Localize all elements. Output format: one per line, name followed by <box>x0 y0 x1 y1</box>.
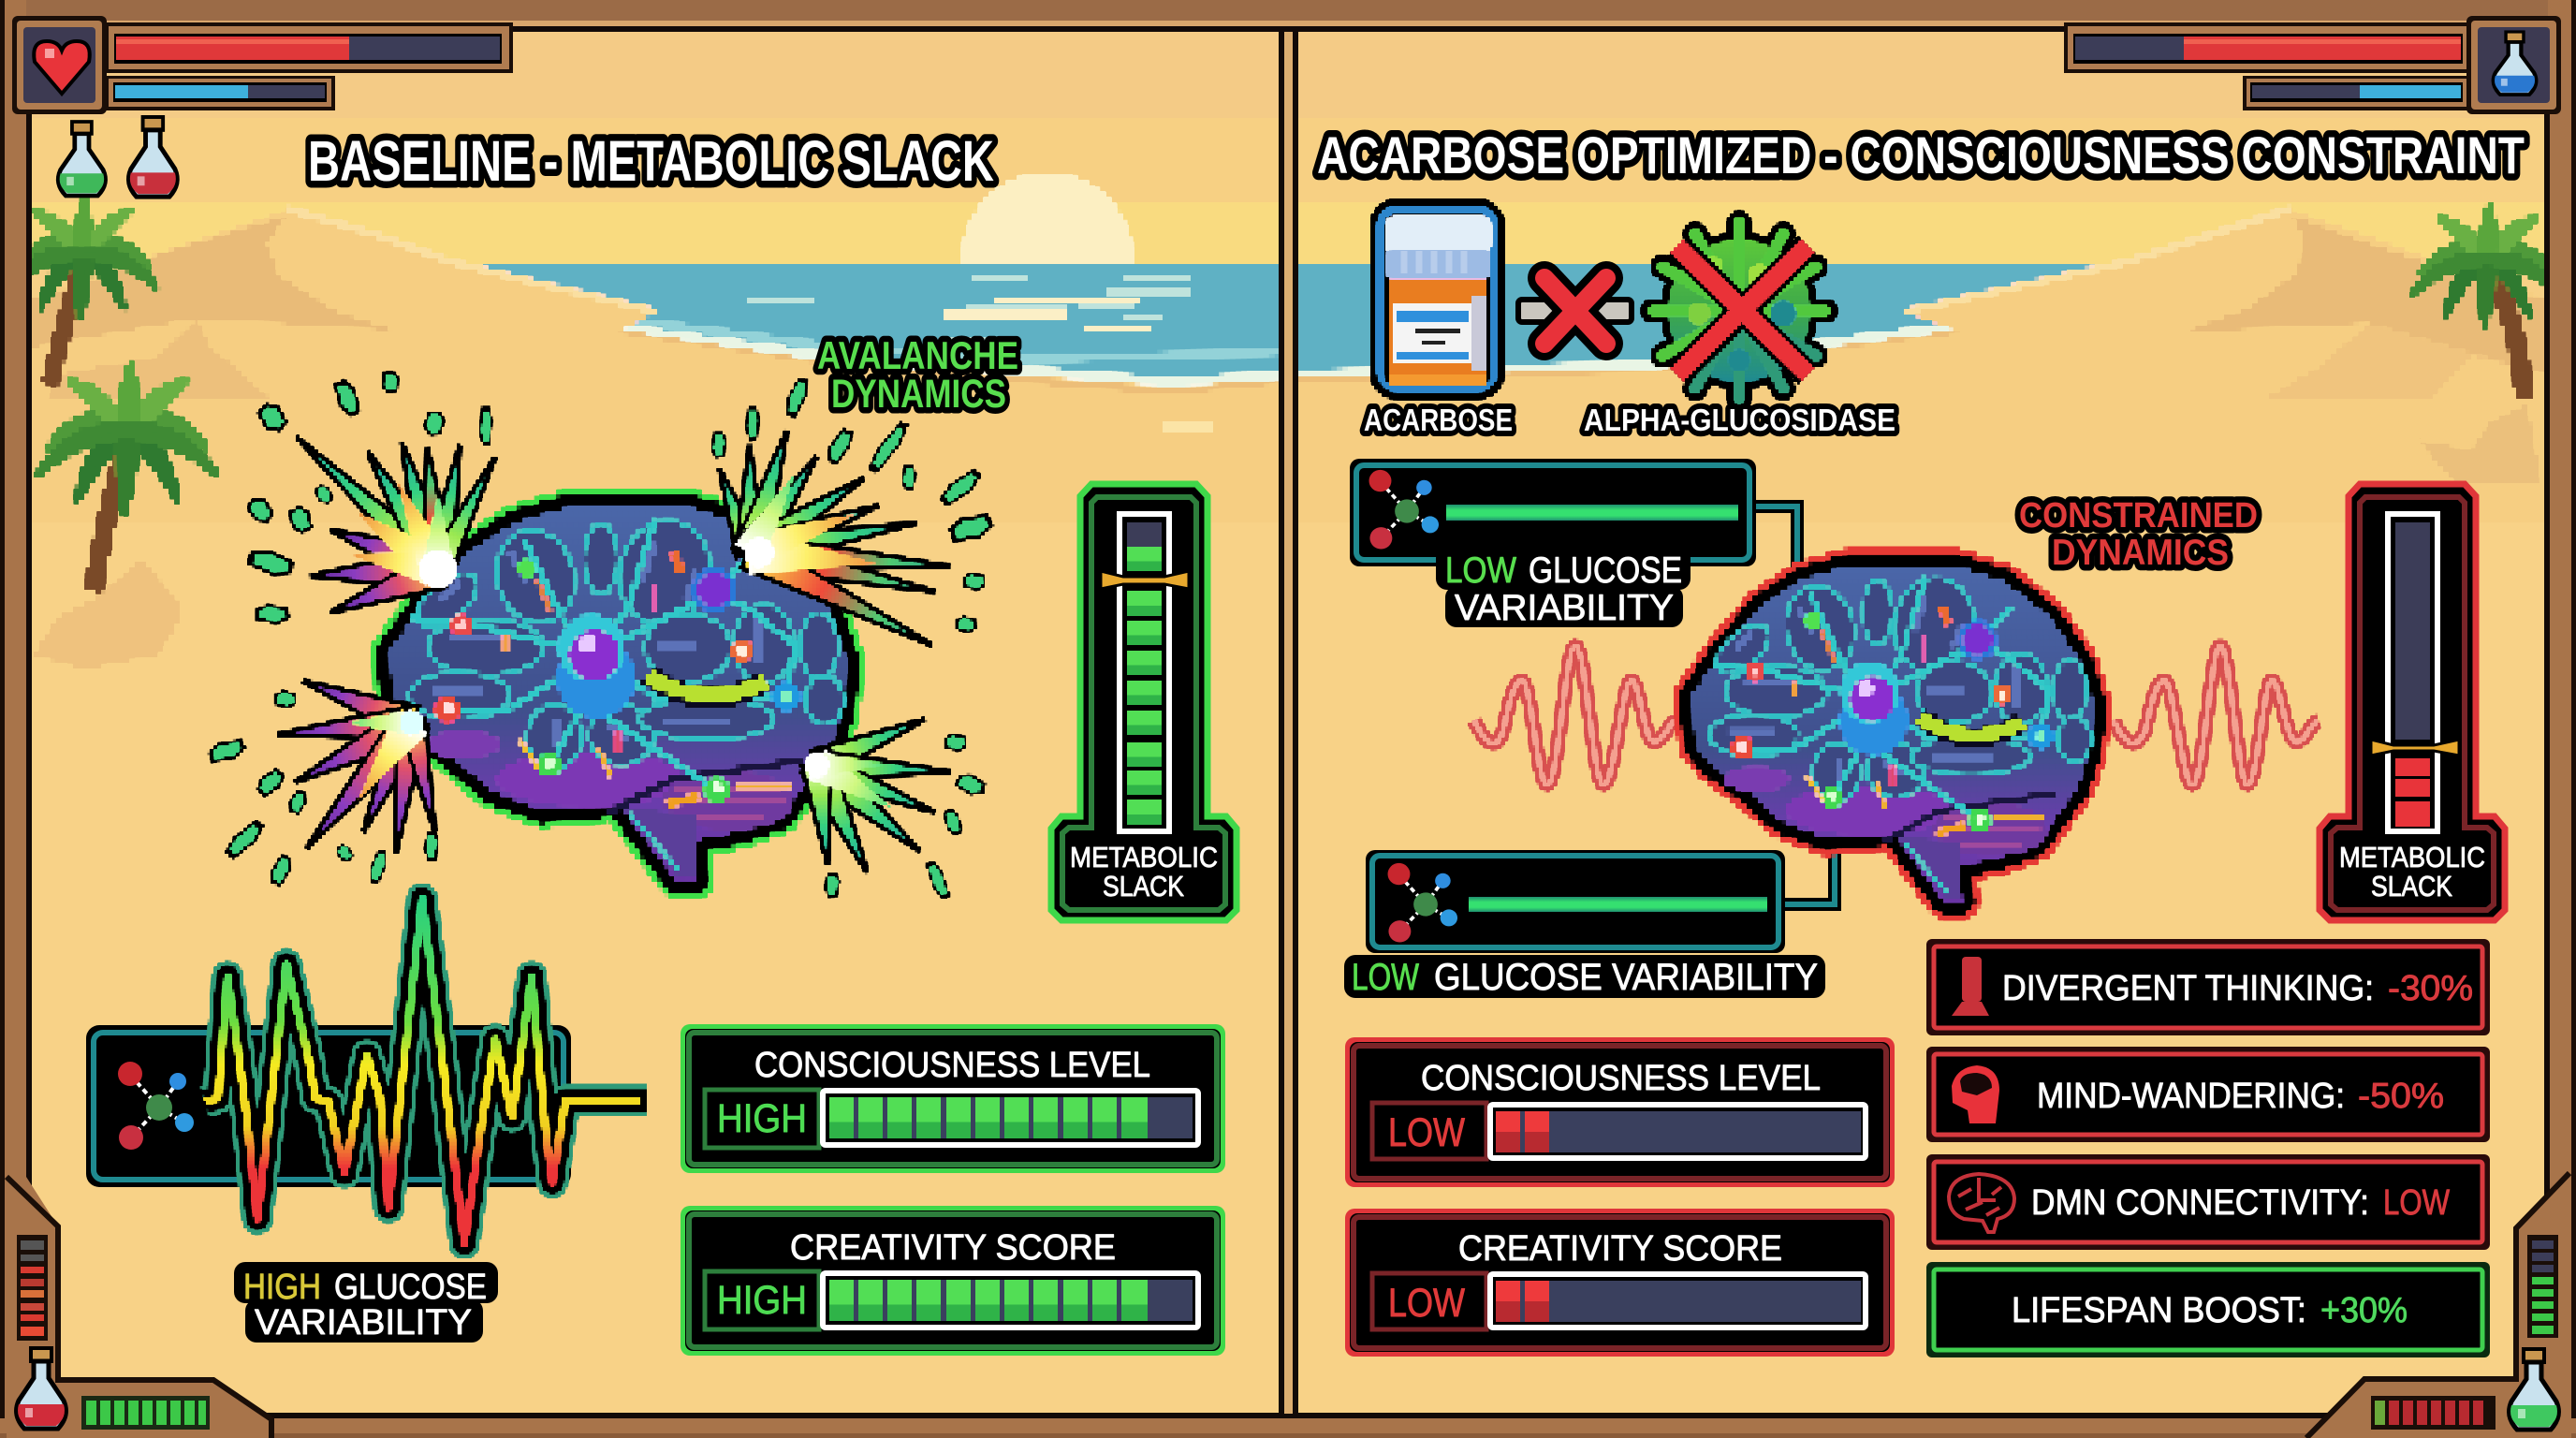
gauge label: SLACK <box>2371 870 2452 902</box>
icon: brain outline <box>1949 1174 2014 1232</box>
stat: mind-wandering <box>1926 1047 2490 1142</box>
badge: low: LOW <box>1388 1110 1465 1155</box>
waveform <box>205 899 646 1243</box>
burst: bottom-left <box>275 665 447 860</box>
burst: top-left <box>286 426 506 630</box>
molecule icon <box>1369 470 1439 549</box>
gauge marker <box>2371 740 2459 756</box>
monitor panel <box>86 1025 571 1187</box>
title: baseline panel: BASELINE - METABOLIC SLACK <box>308 129 994 193</box>
label: low glucose variability top: VARIABILITY <box>1455 588 1674 628</box>
label: constrained dynamics: DYNAMICS <box>2052 533 2229 573</box>
stat text: DIVERGENT THINKING: <box>2002 969 2374 1008</box>
label: high glucose variability: HIGH <box>243 1268 321 1307</box>
label: constrained dynamics: CONSTRAINED <box>2019 496 2258 536</box>
icon: red potion <box>17 1348 66 1429</box>
icon: acarbose pill bottle <box>1369 198 1505 400</box>
gauge label: METABOLIC <box>1070 841 1218 873</box>
icon: green potion <box>2510 1349 2558 1430</box>
panel: consciousness level high <box>681 1024 1225 1173</box>
badge: high <box>705 1090 819 1148</box>
panel: creativity score low <box>1345 1209 1895 1357</box>
stat text: -30% <box>2388 969 2473 1008</box>
stat: lifespan boost <box>1926 1262 2490 1357</box>
label: low glucose variability top <box>1436 547 1690 628</box>
vertical red meter <box>17 1235 48 1341</box>
gauge label <box>1070 841 1218 902</box>
icon: head with thought <box>1952 1065 1999 1123</box>
stat text: LIFESPAN BOOST: <box>2012 1291 2306 1330</box>
constrained waveform: left of brain <box>1474 646 1676 785</box>
badge: low <box>1372 1273 1486 1329</box>
progress bar <box>823 1273 1198 1328</box>
label: low glucose variability top: GLUCOSE <box>1529 550 1682 591</box>
badge: high <box>705 1271 819 1329</box>
palm tree: right panel <box>2413 205 2561 399</box>
stat text: +30% <box>2320 1291 2408 1330</box>
HUD: top-right resource bars <box>2064 16 2561 114</box>
panel: consciousness level low <box>1345 1037 1895 1187</box>
burst: bottom-right <box>802 705 951 880</box>
label: acarbose: ACARBOSE <box>1364 403 1513 437</box>
label: low glucose variability bottom: LOW <box>1352 957 1419 998</box>
stat text: LOW <box>2383 1183 2450 1223</box>
flat glucose line <box>1469 897 1767 912</box>
badge: low <box>1372 1103 1486 1159</box>
flat glucose line <box>1446 505 1738 521</box>
debris shards around left brain <box>209 372 993 899</box>
stat text: DMN CONNECTIVITY: <box>2031 1183 2369 1223</box>
stat text: MIND-WANDERING: <box>2037 1077 2345 1116</box>
heading: CONSCIOUSNESS LEVEL <box>1421 1059 1821 1098</box>
constrained waveform: right of brain <box>2114 646 2319 785</box>
icon: green and red potions <box>58 117 177 197</box>
stat: DMN connectivity <box>1926 1154 2490 1250</box>
bursts around left brain <box>275 426 951 880</box>
thermometer gauge: metabolic slack low <box>2320 484 2505 920</box>
red bar <box>2064 22 2470 73</box>
badge: low: LOW <box>1388 1281 1465 1326</box>
palm trees: left panel <box>8 198 216 592</box>
mana bar <box>105 76 335 110</box>
icon: blue potion <box>2466 16 2561 114</box>
icon: blocked interaction pill and red X <box>1518 278 1632 344</box>
label: avalanche dynamics <box>817 333 1018 417</box>
stat: divergent thinking <box>1926 939 2490 1035</box>
brain: baseline with green outline <box>389 507 847 880</box>
label: avalanche dynamics: DYNAMICS <box>831 372 1006 417</box>
health bar <box>105 22 513 73</box>
gauge label <box>2339 841 2485 902</box>
label: alpha-glucosidase: ALPHA-GLUCOSIDASE <box>1584 403 1895 437</box>
corner HUD: bottom-left <box>7 1177 271 1438</box>
label: avalanche dynamics: AVALANCHE <box>817 333 1018 377</box>
badge: high: HIGH <box>717 1278 807 1323</box>
label: low glucose variability top: LOW <box>1445 550 1516 591</box>
badge: high: HIGH <box>717 1096 807 1141</box>
thermometer gauge: metabolic slack high <box>1051 484 1237 920</box>
heading: CREATIVITY SCORE <box>790 1228 1116 1268</box>
label: low glucose variability bottom: GLUCOSE VARIABILITY <box>1434 957 1818 998</box>
progress bar <box>1490 1274 1866 1328</box>
vertical green meter <box>2527 1235 2558 1338</box>
corner HUD: bottom-right <box>2306 1173 2571 1438</box>
gauge label: METABOLIC <box>2339 841 2485 873</box>
molecule icon <box>118 1062 194 1150</box>
stat text: -50% <box>2358 1077 2444 1116</box>
blue bar <box>2243 76 2470 110</box>
label: high glucose variability: VARIABILITY <box>255 1303 472 1343</box>
molecule icon <box>1388 863 1457 942</box>
label: constrained dynamics <box>2019 496 2258 573</box>
burst: top-right <box>707 426 951 660</box>
green segment meter <box>81 1396 210 1430</box>
low glucose monitor: bottom <box>1366 850 1785 953</box>
icon: falling indicator <box>1952 957 1989 1016</box>
connector lines between glucose monitors and brain <box>1750 506 1835 904</box>
red segment meter <box>2371 1396 2496 1430</box>
label: high glucose variability <box>234 1262 498 1343</box>
icon: heart <box>12 16 107 114</box>
brain: acarbose constrained with red outline <box>1691 565 2095 902</box>
high glucose monitor with volatile waveform <box>86 899 646 1243</box>
progress bar <box>1490 1105 1866 1158</box>
heading: CONSCIOUSNESS LEVEL <box>754 1046 1150 1085</box>
label: high glucose variability: GLUCOSE <box>334 1268 487 1307</box>
progress bar <box>823 1091 1198 1145</box>
HUD: top-left health and mana <box>12 16 513 114</box>
icon: alpha-glucosidase enzyme crossed out <box>1653 223 1825 398</box>
panel: creativity score high <box>681 1206 1225 1356</box>
gauge marker <box>1101 571 1189 589</box>
low glucose monitor: top <box>1350 459 1756 566</box>
heading: CREATIVITY SCORE <box>1458 1229 1782 1269</box>
gauge label: SLACK <box>1103 870 1184 902</box>
